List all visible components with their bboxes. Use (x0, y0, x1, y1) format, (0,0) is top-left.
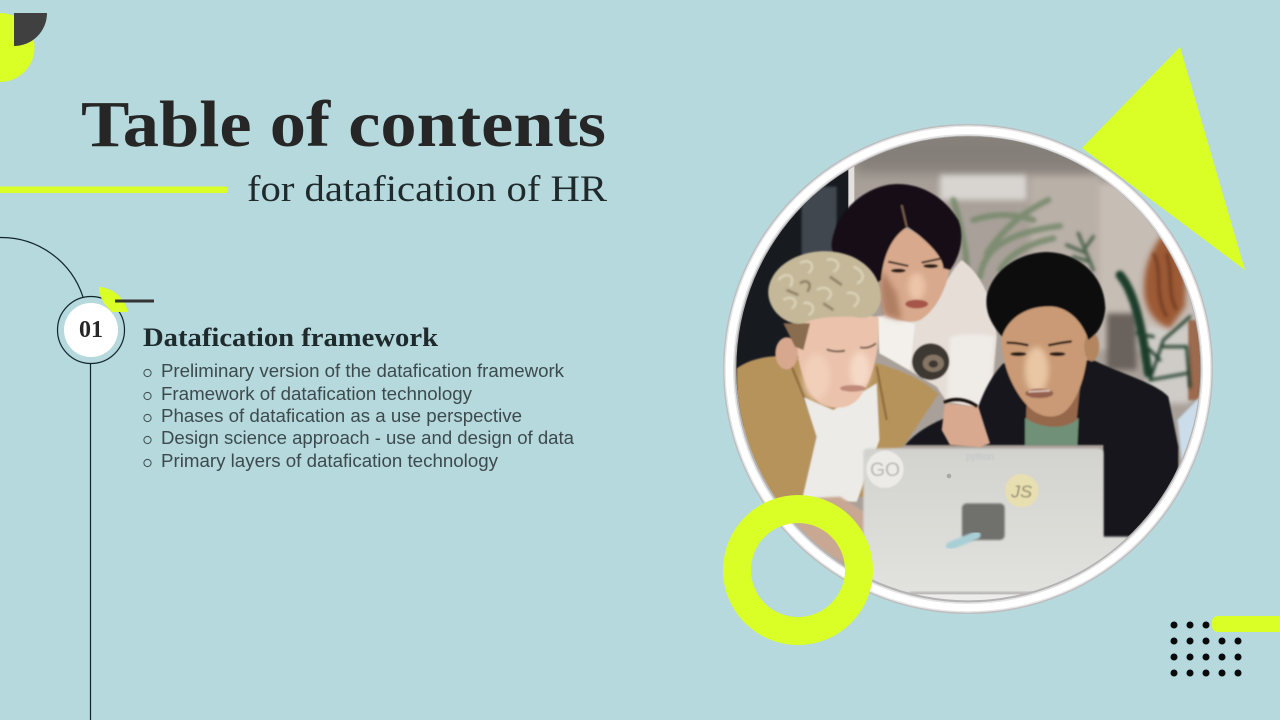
curly hair (768, 251, 881, 324)
face (797, 316, 879, 408)
photo: forearm at table (796, 496, 864, 564)
photo: laptop (863, 448, 1133, 608)
lime triangle (1082, 47, 1245, 270)
link sticker (950, 535, 977, 546)
GO sticker: GO (870, 460, 900, 481)
grey sticker (962, 503, 1005, 540)
lime petal accent (99, 287, 128, 312)
photo: blond person (737, 251, 938, 502)
eyes (827, 349, 845, 351)
lime ring (737, 509, 859, 631)
section heading: Datafication framework (143, 323, 439, 352)
neck (1026, 387, 1080, 427)
dark dash accent (115, 300, 154, 302)
title: Table of contents (81, 88, 606, 161)
camera dot (947, 474, 951, 478)
bullet 3: Phases of datafication as a use perspective (161, 406, 522, 426)
bullet 4: Design science approach - use and design of data (161, 428, 575, 448)
JS sticker (1005, 474, 1038, 507)
tee (802, 383, 879, 502)
photo background wall (736, 136, 1200, 590)
face (881, 228, 949, 322)
section number badge (58, 287, 154, 364)
mouth (1025, 389, 1053, 398)
bullet 2: Framework of datafication technology (161, 384, 472, 404)
dot grid (1170, 622, 1242, 676)
tee (1025, 418, 1079, 445)
tee (877, 317, 915, 370)
jacket (905, 360, 1178, 540)
circular photo frame (720, 120, 1220, 620)
eyes and brows (1007, 343, 1028, 345)
photo: background person red hair (1144, 233, 1203, 467)
section bullet list (144, 361, 575, 471)
photo: plants (953, 200, 1190, 387)
accent bar under title (0, 186, 228, 193)
hair (832, 184, 961, 283)
photo: people around a laptop (720, 120, 1220, 620)
logo (912, 343, 949, 380)
face (1002, 307, 1088, 417)
subtitle: for datafication of HR (247, 169, 607, 210)
lime bar bottom right (1212, 616, 1280, 632)
decoration: top-left circles (0, 13, 47, 82)
ear (1084, 332, 1099, 361)
timeline connector arc and line (0, 237, 90, 720)
mouth (840, 385, 865, 392)
section number: 01 (79, 317, 103, 343)
afro hair (986, 252, 1105, 340)
ear (775, 337, 798, 369)
python label: python (966, 451, 994, 461)
photo: dark-haired person (905, 252, 1178, 540)
GO sticker (866, 451, 904, 488)
sideburn (783, 323, 810, 350)
eyes and brows (888, 262, 908, 266)
photo: middle person (832, 184, 997, 410)
mouth (905, 300, 928, 308)
bullet 1: Preliminary version of the datafication framework (161, 361, 565, 381)
jacket (737, 356, 938, 500)
JS sticker: JS (1010, 481, 1032, 501)
sweatshirt (877, 260, 997, 410)
bullet 5: Primary layers of datafication technology (161, 451, 498, 471)
photo: pointing hand (942, 399, 990, 447)
